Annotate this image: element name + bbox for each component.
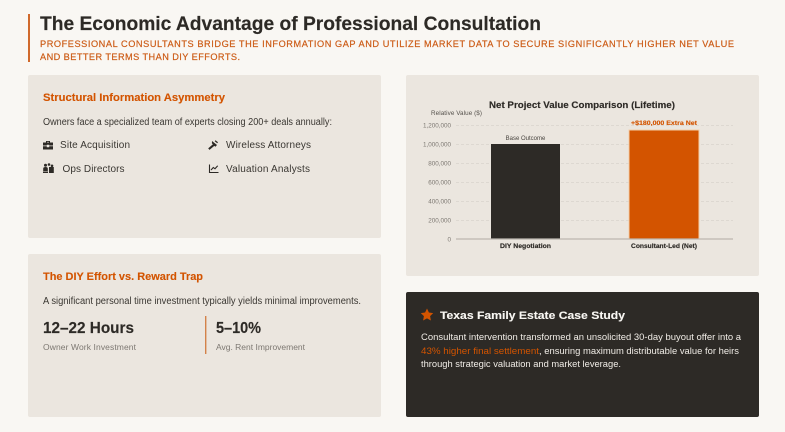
bar: DIY negotiation: Base Outcome xyxy=(506,136,546,142)
header xyxy=(28,13,734,62)
icon: people xyxy=(43,163,54,173)
x axis labels xyxy=(500,243,697,250)
title: The Economic Advantage of Professional Consultation xyxy=(40,13,541,35)
text: case study body: Consultant intervention transformed an unsolicited 30-day buyout offer into a xyxy=(421,332,742,343)
bar: consultant-led: +$180,000 Extra Net xyxy=(631,120,697,127)
item: site acquisition: Site Acquisition xyxy=(60,140,130,151)
text: case study body: , ensuring maximum distributable value for heirs xyxy=(539,346,739,357)
text: owners face: Owners face a specialized team of experts closing 200+ deals annually: xyxy=(43,117,332,128)
panel: DIY effort vs reward xyxy=(28,254,381,417)
stat: hours: 12–22 Hours xyxy=(43,320,134,337)
text: time investment: A significant personal time investment typically yields minimal improvements. xyxy=(43,296,361,307)
y axis title: Relative Value ($) xyxy=(431,110,482,117)
icon: line chart xyxy=(210,164,218,172)
panel: case study xyxy=(406,292,759,417)
heading: DIY effort: The DIY Effort vs. Reward Trap xyxy=(43,271,203,283)
heading: structural information asymmetry: Structural Information Asymmetry xyxy=(43,92,226,104)
icon: briefcase xyxy=(43,141,53,150)
item: ops directors: Ops Directors xyxy=(62,164,124,175)
chart title: Net Project Value Comparison (Lifetime) xyxy=(489,100,675,111)
y axis labels: 1,200,000 xyxy=(423,122,451,130)
item: wireless attorneys: Wireless Attorneys xyxy=(226,140,311,151)
text: case study body: 43% higher final settlement xyxy=(421,346,539,357)
text: case study body: through strategic valuation and market leverage. xyxy=(421,359,621,370)
bar: consultant-led xyxy=(629,120,699,239)
x axis labels: DIY Negotiation xyxy=(500,243,551,250)
subtitle xyxy=(40,39,734,62)
x axis labels: Consultant-Led (Net) xyxy=(631,243,697,250)
y axis labels xyxy=(423,122,451,244)
stat: rent improvement: 5–10% xyxy=(216,320,261,337)
subtitle: AND BETTER TERMS THAN DIY EFFORTS. xyxy=(40,52,240,62)
icon: star xyxy=(421,308,433,320)
grid lines xyxy=(456,126,733,220)
panel: chart xyxy=(406,75,759,276)
stat: rent improvement xyxy=(216,320,306,352)
y axis labels: 800,000 xyxy=(428,160,451,168)
heading: case study: Texas Family Estate Case Study xyxy=(440,310,626,322)
stat: hours xyxy=(43,320,137,352)
y axis labels: 1,000,000 xyxy=(423,142,451,148)
bar: DIY negotiation xyxy=(491,136,560,239)
y axis labels: 600,000 xyxy=(428,180,451,186)
y axis labels: 200,000 xyxy=(428,218,451,224)
stat: rent improvement: Avg. Rent Improvement xyxy=(216,342,306,352)
y axis labels: 0 xyxy=(447,236,451,244)
subtitle: PROFESSIONAL CONSULTANTS BRIDGE THE INFORMATION GAP AND UTILIZE MARKET DATA TO SECURE SIGNIFICANTLY HIGHER NET VALUE xyxy=(40,39,734,49)
panel: structural information asymmetry xyxy=(28,75,381,238)
text: case study body xyxy=(421,332,742,370)
y axis labels: 400,000 xyxy=(428,198,451,206)
stat: hours: Owner Work Investment xyxy=(43,342,137,352)
item: valuation analysts: Valuation Analysts xyxy=(226,164,310,175)
icon: gavel xyxy=(208,140,218,150)
